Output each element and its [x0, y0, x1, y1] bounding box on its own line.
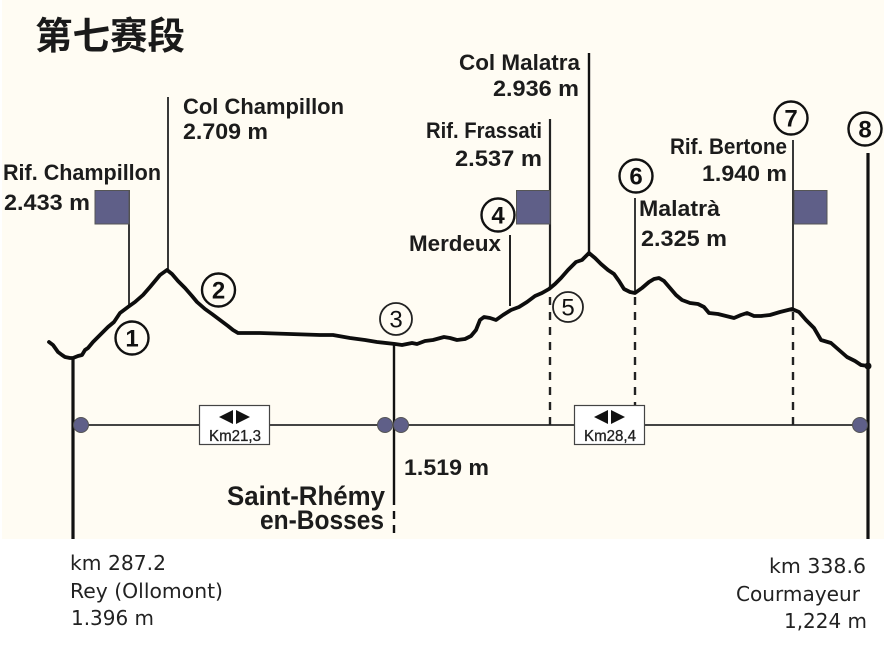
distance box: Km21,3: Km21,3 — [209, 428, 261, 445]
marker 1 — [116, 322, 148, 354]
marker 7: 7 — [784, 106, 798, 132]
finish location text — [736, 554, 867, 633]
distance box: Km21,3 — [200, 406, 270, 445]
label: Saint-Rhémy en-Bosses: Saint-Rhémy — [227, 481, 385, 511]
label: Rif. Frassati — [426, 118, 542, 171]
start location text — [70, 551, 223, 630]
distance axis line — [73, 424, 868, 426]
marker 5: 5 — [561, 294, 575, 322]
marker 7 — [774, 102, 808, 134]
marker 4 — [482, 198, 514, 232]
label: Rif. Frassati: Rif. Frassati — [426, 118, 542, 143]
flag: Rif. Champillon — [95, 190, 129, 224]
label: Saint-Rhémy en-Bosses: en-Bosses — [260, 505, 384, 535]
label: Rif. Bertone: Rif. Bertone — [670, 134, 787, 159]
label: Col Champillon — [183, 94, 344, 144]
marker 6 — [620, 160, 652, 192]
marker 8: 8 — [858, 116, 872, 144]
label: Merdeux: Merdeux — [409, 231, 501, 256]
flag: Rif. Frassati — [516, 190, 550, 224]
start location text: 1.396 m — [71, 606, 154, 630]
label: Malatrà: 2.325 m — [641, 226, 727, 251]
end dot on profile — [864, 362, 872, 370]
label: Rif. Champillon — [3, 160, 161, 215]
start location text: km 287.2 — [70, 551, 166, 575]
marker 2 — [202, 274, 235, 306]
label: Col Malatra — [459, 50, 580, 101]
label: Rif. Champillon: Rif. Champillon — [3, 160, 161, 185]
flag: Rif. Bertone — [794, 190, 827, 224]
marker 3 — [380, 303, 412, 335]
label: Col Champillon: 2.709 m — [183, 119, 268, 144]
leader lines — [73, 53, 868, 539]
marker 3: 3 — [389, 306, 403, 334]
marker 6: 6 — [629, 164, 643, 190]
axis dots — [74, 418, 868, 432]
label: Col Malatra: Col Malatra — [459, 50, 580, 75]
finish location text: km 338.6 — [769, 554, 866, 578]
marker 5 — [553, 292, 583, 322]
marker 1: 1 — [125, 326, 139, 352]
label: Malatrà: Malatrà — [639, 196, 720, 221]
label: Rif. Champillon: 2.433 m — [4, 190, 90, 215]
distance box: Km28,4: Km28,4 — [584, 428, 636, 445]
label: Col Malatra: 2.936 m — [493, 76, 579, 101]
distance box: Km28,4 — [574, 406, 644, 445]
start location text: Rey (Ollomont) — [70, 579, 223, 603]
label: Col Champillon: Col Champillon — [183, 94, 344, 119]
label: Rif. Bertone: 1.940 m — [702, 161, 787, 186]
finish location text: Courmayeur — [736, 582, 861, 606]
label: Rif. Frassati: 2.537 m — [455, 146, 542, 171]
label: Saint-Rhémy elevation: 1.519 m — [404, 455, 489, 480]
elevation profile line — [49, 253, 868, 366]
marker 2: 2 — [212, 278, 225, 304]
marker 8 — [848, 112, 882, 146]
label: Rif. Bertone — [670, 134, 787, 186]
label: Saint-Rhémy en-Bosses — [227, 481, 385, 535]
finish location text: 1,224 m — [784, 609, 867, 633]
label: Malatrà — [639, 196, 727, 251]
marker 4: 4 — [491, 202, 505, 230]
title: 第七赛段 — [35, 5, 185, 60]
